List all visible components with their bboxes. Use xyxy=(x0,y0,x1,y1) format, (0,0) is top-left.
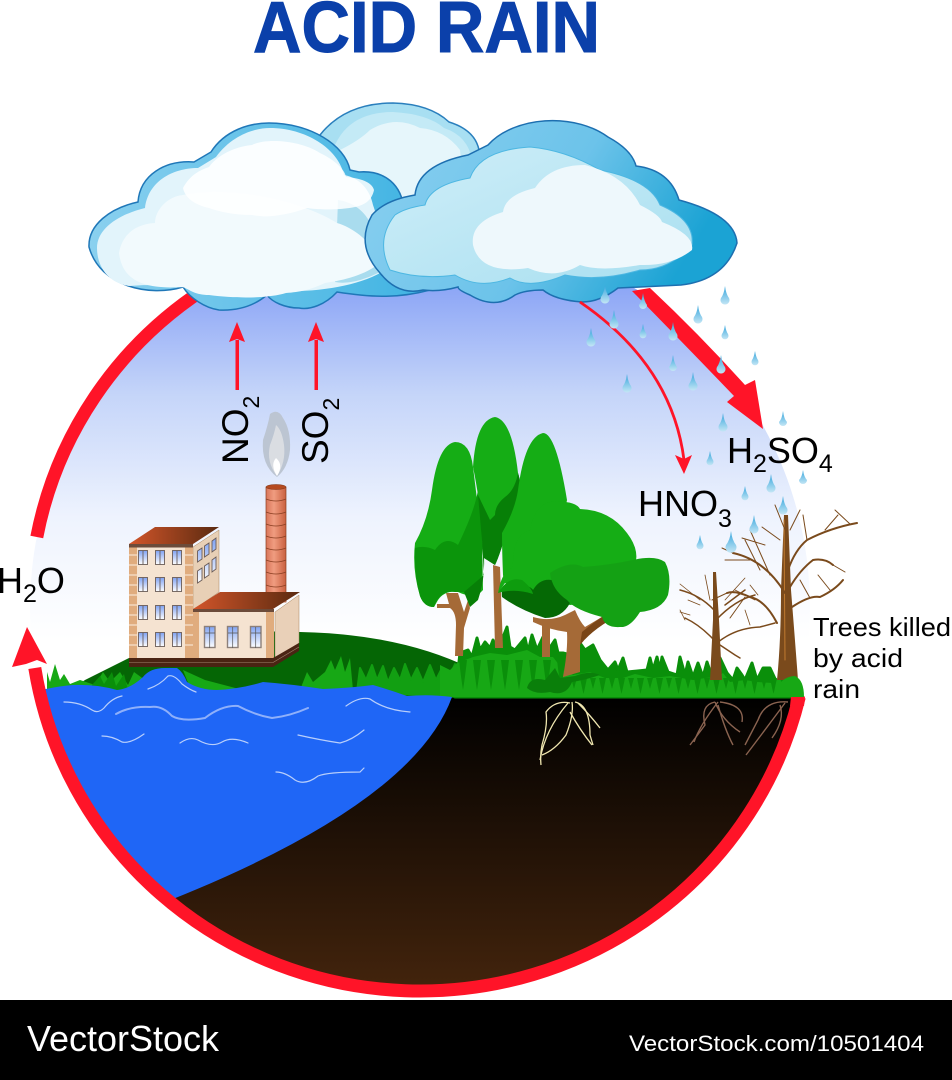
grass: bright tuft by hill xyxy=(300,656,353,690)
cloud: left xyxy=(89,123,430,310)
label: SO2: SO xyxy=(295,411,336,464)
footer: brand: VectorStock xyxy=(27,1018,220,1059)
water ripples xyxy=(64,676,410,782)
grass: dark bush at trunk xyxy=(527,668,600,693)
rain drops xyxy=(586,285,807,553)
grass: far left xyxy=(47,664,145,697)
roots: living tree xyxy=(540,702,600,765)
footer: url: VectorStock.com/10501404 xyxy=(629,1031,924,1056)
low building xyxy=(193,592,300,658)
label: HNO3: HNO xyxy=(638,483,718,524)
grass: bright band xyxy=(440,650,802,697)
label: HNO3: 3 xyxy=(718,505,732,533)
tree: right poplar xyxy=(502,433,567,584)
thick arrow to H2SO4 xyxy=(632,288,763,429)
tree: left poplar shade xyxy=(415,490,483,607)
label: H2O: 2 xyxy=(23,580,37,608)
arrow: NO2 rising xyxy=(229,322,245,390)
dead tree: small xyxy=(680,572,775,680)
cloud: back xyxy=(320,103,500,260)
grass strip xyxy=(47,627,802,697)
label: H2SO4: SO xyxy=(767,430,819,471)
label: NO2: 2 xyxy=(238,396,264,408)
tree: centre poplar shade xyxy=(464,473,520,607)
label: trees killed by acid rain: rain xyxy=(813,674,860,704)
tree: front clump xyxy=(550,558,669,627)
tree: canopy patch xyxy=(498,579,533,594)
tree: broad canopy xyxy=(498,502,636,605)
tree: left poplar xyxy=(414,442,483,607)
windows xyxy=(138,538,216,646)
ring arrow: lower cycle to H2O xyxy=(12,627,805,991)
cloud: right xyxy=(365,121,737,303)
grass: dark blades centre xyxy=(457,660,567,694)
tall building xyxy=(129,527,219,658)
grass: dark blades lower xyxy=(565,678,790,697)
brick base xyxy=(129,643,299,667)
grass: mid blades on hill xyxy=(357,664,460,697)
clouds xyxy=(89,103,737,310)
water body xyxy=(30,668,452,899)
tree: dark canopy xyxy=(502,580,570,618)
chimney xyxy=(266,484,286,604)
ring arc: upper left xyxy=(37,290,203,537)
green trees group xyxy=(414,417,669,677)
grass: dark tufted silhouette xyxy=(455,627,790,697)
label: H2SO4: H xyxy=(727,430,753,471)
label: H2O: O xyxy=(37,560,65,601)
tree: centre poplar xyxy=(473,417,520,565)
arrow: SO2 rising xyxy=(308,322,324,390)
soil cross-section xyxy=(176,698,791,984)
thin arrow to HNO3 xyxy=(580,302,692,474)
label: H2SO4: 4 xyxy=(819,450,833,478)
grass: bright patch by pond xyxy=(183,670,243,694)
smoke plume xyxy=(263,412,290,477)
label: SO2: 2 xyxy=(318,398,344,411)
hill behind factory xyxy=(60,632,500,697)
label: trees killed by acid rain: by acid xyxy=(813,643,903,673)
footer bar xyxy=(0,1000,952,1080)
dead trees xyxy=(680,505,857,680)
label: trees killed by acid rain: Trees killed xyxy=(813,612,951,642)
label: H2SO4: 2 xyxy=(753,450,767,478)
factory xyxy=(129,484,300,667)
tree trunks xyxy=(437,565,610,677)
roots: dead trees xyxy=(690,702,788,755)
sky background xyxy=(31,288,808,582)
label: NO2: NO xyxy=(215,408,256,464)
dead tree: large xyxy=(712,505,857,680)
foreground grass at dead trees xyxy=(772,676,804,697)
